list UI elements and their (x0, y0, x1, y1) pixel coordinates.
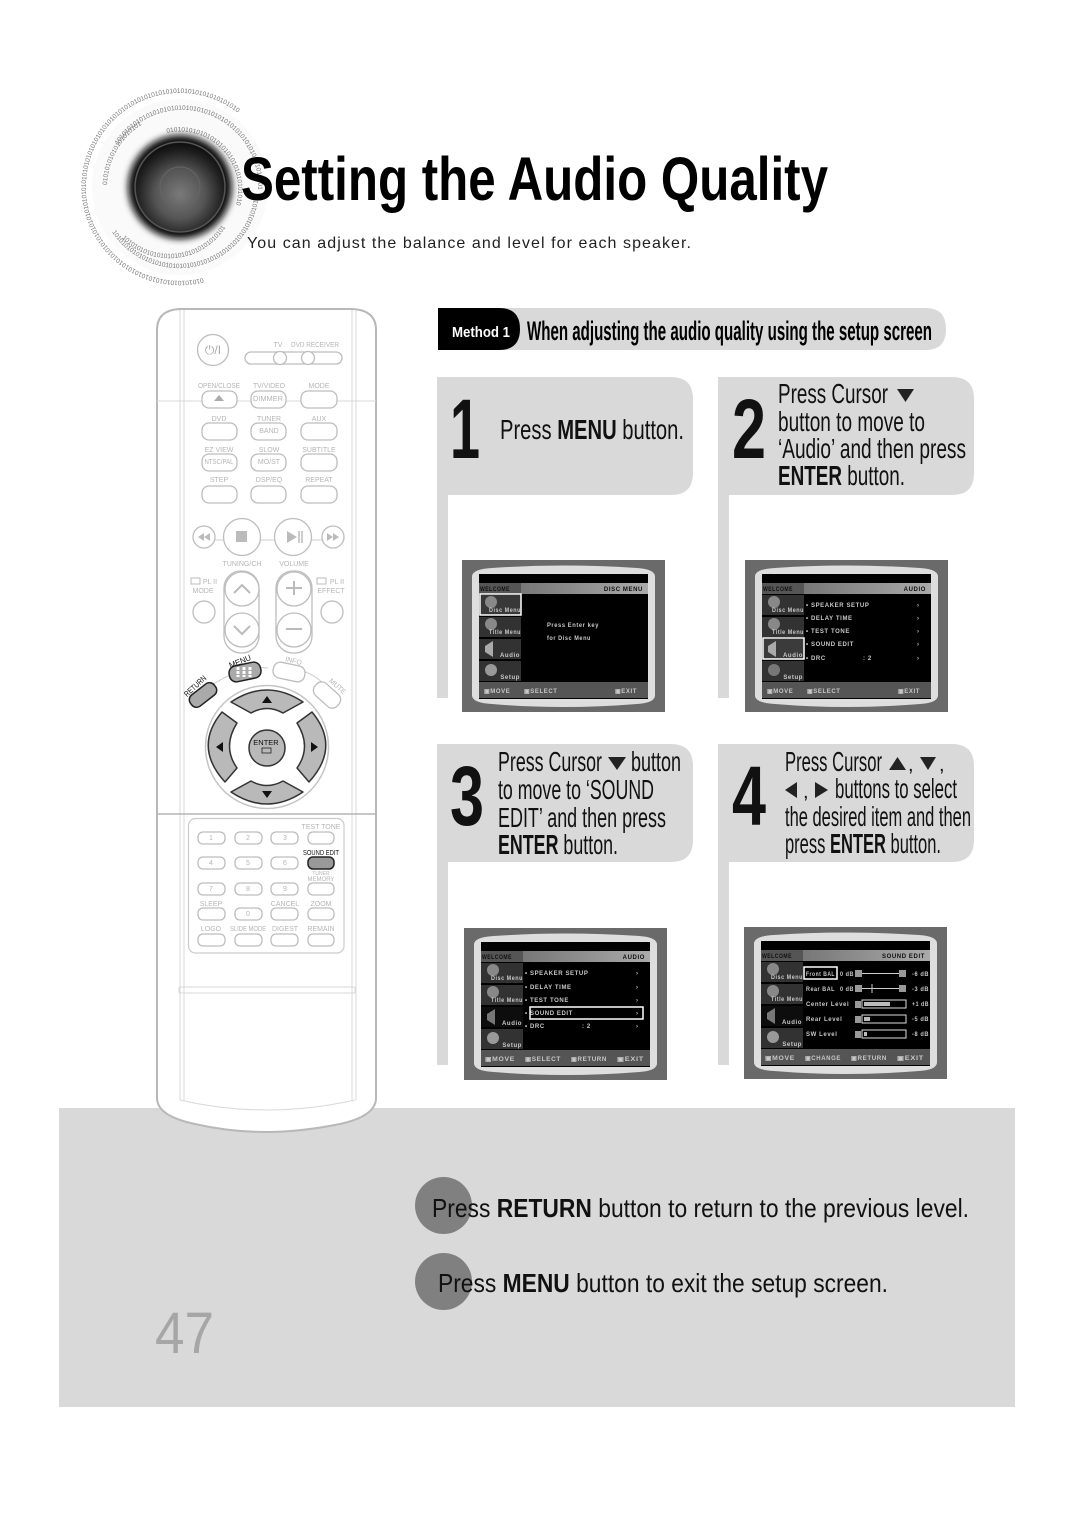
top buttons: AUX (312, 416, 327, 423)
screen 2: audio menu: ▣MOVE (767, 689, 793, 695)
screen 4: sound edit levels: Setup (782, 1042, 802, 1048)
step 2 card: button to move to (778, 406, 925, 437)
screen 3: sound edit selected: › (636, 1011, 639, 1017)
step 4 card: , (939, 754, 945, 776)
number keypad: SLEEP (200, 901, 223, 908)
number keypad: LOGO (201, 926, 222, 933)
screen 3: sound edit selected: AUDIO (623, 955, 645, 961)
transport buttons: TUNING/CH (223, 561, 261, 568)
screen 3: sound edit selected: › (636, 998, 639, 1004)
screen 1: disc menu: ▣SELECT (524, 689, 558, 695)
screen 2: audio menu: Audio (783, 653, 803, 659)
screen 1: disc menu: for Disc Menu (547, 636, 591, 642)
step 2 card: Press Cursor (778, 378, 888, 409)
number keypad: 5 (246, 860, 250, 867)
remote control (157, 309, 376, 1132)
screen 4: sound edit levels: Audio (782, 1020, 802, 1026)
number keypad: 6 (283, 860, 287, 867)
screen 2: audio menu: Disc Menu (772, 608, 804, 614)
screen 3: sound edit selected: Setup (502, 1043, 522, 1049)
step 4 card: , (908, 754, 914, 776)
step 2 card: ‘Audio’ and then press (778, 433, 966, 464)
number keypad (188, 818, 344, 953)
tuning and volume rockers: EFFECT (317, 588, 345, 595)
screen 1: disc menu: ▣EXIT (615, 689, 637, 695)
screen 3: sound edit selected: WELCOME (482, 955, 512, 961)
note 2 bullet (415, 1253, 472, 1310)
top buttons: DVD RECEIVER (291, 342, 339, 349)
step 3 card: button (631, 746, 681, 777)
binary rings: 101010101010101010101010101010101010101010101010101010101010101010101010101010101010101010101010 (112, 200, 258, 268)
number keypad: DIGEST (272, 926, 299, 933)
screen 4: sound edit levels: Rear Level (806, 1017, 842, 1023)
screen 4: sound edit levels: ▣EXIT (897, 1056, 924, 1062)
screen 4: sound edit levels: ▣CHANGE (805, 1056, 841, 1062)
subtitle: You can adjust the balance and level for each speaker. (247, 235, 691, 252)
step 4 card: 4 (732, 749, 766, 843)
screen 2: audio menu: › (917, 642, 920, 648)
top buttons: DSP/EQ (256, 477, 283, 484)
step 2 card: 2 (732, 382, 766, 476)
screen 4: sound edit levels: Disc Menu (771, 975, 803, 981)
number keypad: 0 (246, 911, 250, 918)
screen 4: sound edit levels: -5 dB (912, 1017, 929, 1023)
screen 1: disc menu: Disc Menu (489, 608, 521, 614)
screen 2: audio menu: Setup (783, 675, 803, 681)
screen 2: audio menu: › (917, 603, 920, 609)
screen 3: sound edit selected: • DELAY TIME (525, 985, 572, 991)
background band (59, 1108, 1015, 1407)
screen 2: audio menu: › (917, 629, 920, 635)
binary rings: 0101010101010101010101010101010101010101010101010101010101010101010101010101010101010101010101010101010101010101010101010101010101010101010101010101010 (81, 88, 240, 286)
note 1 bullet (415, 1177, 472, 1234)
step 4 card: buttons to select (835, 773, 957, 804)
page number: 47 (155, 1301, 214, 1366)
screen 3: sound edit selected (464, 928, 667, 1080)
step 2 card: ENTER button. (778, 460, 905, 491)
speaker emblem (81, 88, 263, 286)
screen 3: sound edit selected: : 2 (582, 1024, 591, 1030)
screen 3: sound edit selected: Title Menu (491, 998, 523, 1004)
number keypad: 1 (209, 835, 213, 842)
step 1 card (437, 377, 693, 698)
step 3 card: EDIT’ and then press (498, 802, 666, 833)
number keypad: TUNER (312, 871, 330, 877)
step 4 card (718, 744, 974, 1065)
top buttons: MO/ST (258, 459, 281, 466)
top buttons: TUNER (257, 416, 281, 423)
icon: down triangle (897, 389, 914, 402)
highlighted return and menu buttons: MENU (228, 653, 253, 670)
screen 4: sound edit levels: -3 dB (912, 987, 929, 993)
tuning and volume rockers: MODE (192, 588, 214, 595)
screen 2: audio menu: • DRC (806, 656, 826, 662)
screen 3: sound edit selected: • SPEAKER SETUP (525, 971, 588, 977)
method banner (438, 308, 946, 350)
method banner: Method 1 (452, 324, 510, 341)
tuning and volume rockers (191, 571, 345, 653)
step 3 card: Press Cursor (498, 746, 602, 777)
screen 1: disc menu (462, 560, 665, 712)
step 3 card: to move to ‘SOUND (498, 774, 654, 805)
top buttons: DIMMER (253, 396, 283, 403)
screen 2: audio menu: ▣SELECT (807, 689, 841, 695)
step 3 card: 3 (450, 749, 484, 843)
selection box (530, 1007, 643, 1019)
highlighted return and menu buttons: RETURN (182, 674, 208, 699)
transport buttons: VOLUME (279, 561, 309, 568)
transport buttons (193, 518, 344, 568)
screen 3: sound edit selected: • TEST TONE (525, 998, 569, 1004)
step 4 card: Press Cursor (785, 746, 882, 777)
screen 3: sound edit selected: ▣EXIT (617, 1057, 644, 1063)
screen 4: sound edit levels: Front BAL (806, 972, 835, 978)
number keypad: REMAIN (307, 926, 335, 933)
top buttons: MODE (308, 383, 330, 390)
top buttons: ⏻/I (205, 343, 221, 357)
screen 2: audio menu: › (917, 656, 920, 662)
tuning and volume rockers: PL II (330, 579, 344, 586)
screen 4: sound edit levels: 0 dB (840, 972, 854, 978)
screen 2: audio menu: Title Menu (772, 630, 804, 636)
screen 4: sound edit levels: SOUND EDIT (882, 954, 925, 960)
screen 1: disc menu: Setup (500, 675, 520, 681)
navigation pad (206, 686, 328, 808)
top buttons: REPEAT (305, 477, 333, 484)
screen 4: sound edit levels: 0 dB (840, 987, 854, 993)
screen 2: audio menu: WELCOME (763, 587, 793, 593)
step 2 card (718, 377, 974, 698)
screen 2: audio menu: : 2 (863, 656, 872, 662)
screen 1: disc menu: ▣MOVE (484, 689, 510, 695)
screen 2: audio menu: • SOUND EDIT (806, 642, 854, 648)
icon: cursor triangles (785, 757, 936, 798)
top buttons: TV (274, 342, 283, 349)
screen 4: sound edit levels: SW Level (806, 1032, 837, 1038)
screen 3: sound edit selected: ▣MOVE (485, 1057, 515, 1063)
step 1 card: Press MENU button. (500, 414, 684, 445)
screen 4: sound edit levels: -6 dB (912, 972, 929, 978)
navigation pad: ENTER (253, 738, 279, 747)
screen 2: audio menu: AUDIO (904, 587, 926, 593)
screen 4: sound edit levels: Rear BAL (806, 987, 835, 993)
step 1 card: 1 (450, 382, 480, 476)
screen 1: disc menu: Title Menu (489, 630, 521, 636)
step 4 card: press ENTER button. (785, 828, 941, 859)
screen 3: sound edit selected: • DRC (525, 1024, 545, 1030)
number keypad: 3 (283, 835, 287, 842)
binary rings: 10101010101010101010101010101010101010101010101010101010101 (122, 226, 226, 258)
screen 2: audio menu: › (917, 616, 920, 622)
screen 4: sound edit levels: WELCOME (762, 954, 792, 960)
screen 2: audio menu (745, 560, 948, 712)
remote body (157, 309, 376, 1132)
highlighted return and menu buttons (182, 653, 347, 711)
number keypad: 4 (209, 860, 213, 867)
screen 4: sound edit levels: -8 dB (912, 1032, 929, 1038)
top buttons: EZ VIEW (205, 447, 234, 454)
top buttons: TV/VIDEO (253, 383, 286, 390)
top buttons: SLOW (259, 447, 280, 454)
selection box (804, 967, 837, 979)
screen 4: sound edit levels: ▣MOVE (765, 1056, 795, 1062)
number keypad: SOUND EDIT (303, 848, 339, 857)
number keypad: 2 (246, 835, 250, 842)
screen 2: audio menu: • DELAY TIME (806, 616, 853, 622)
screen 4: sound edit levels (744, 927, 947, 1079)
screen 4: sound edit levels: +1 dB (912, 1002, 929, 1008)
step 3 card: ENTER button. (498, 829, 618, 860)
tuning and volume rockers: PL II (203, 579, 217, 586)
top buttons: DVD (212, 416, 226, 423)
highlighted sound edit button (308, 857, 334, 869)
binary rings (81, 88, 263, 286)
screen 1: disc menu: DISC MENU (604, 587, 643, 593)
screen 4: sound edit levels: Center Level (806, 1002, 849, 1008)
top buttons (198, 334, 342, 503)
number keypad: SLIDE MODE (230, 926, 266, 933)
number keypad: 8 (246, 886, 250, 893)
highlighted return and menu buttons: INFO (284, 656, 303, 667)
screen 3: sound edit selected: • SOUND EDIT (525, 1011, 573, 1017)
screen 3: sound edit selected: › (636, 1024, 639, 1030)
number keypad: TEST TONE (302, 824, 341, 831)
highlighted return and menu buttons: MUTE (327, 678, 347, 696)
number keypad: MEMORY (308, 877, 334, 883)
screen 3: sound edit selected: Audio (502, 1021, 522, 1027)
note 2: Press MENU button to exit the setup screen. (438, 1268, 888, 1298)
screen 1: disc menu: Press Enter key (547, 623, 599, 629)
icon: down triangle (608, 757, 626, 770)
top buttons: OPEN/CLOSE (198, 383, 240, 390)
note 1: Press RETURN button to return to the previous level. (432, 1193, 969, 1223)
screen 3: sound edit selected: › (636, 985, 639, 991)
step 4 card: , (803, 781, 809, 803)
number keypad: 7 (209, 886, 213, 893)
screen 1: disc menu: Audio (500, 653, 520, 659)
screen 1: disc menu: WELCOME (480, 587, 510, 593)
screen 3: sound edit selected: ▣RETURN (571, 1057, 607, 1063)
screen 4: sound edit levels: ▣RETURN (851, 1056, 887, 1062)
screen 2: audio menu: • TEST TONE (806, 629, 850, 635)
title: Setting the Audio Quality (241, 145, 828, 213)
screen 4: sound edit levels: Title Menu (771, 997, 803, 1003)
step 3 card (437, 744, 693, 1065)
number keypad: CANCEL (271, 901, 299, 908)
number keypad: 9 (283, 886, 287, 893)
top buttons: STEP (210, 477, 228, 484)
screen 3: sound edit selected: ▣SELECT (525, 1057, 561, 1063)
screen 3: sound edit selected: › (636, 971, 639, 977)
top buttons: NTSC/PAL (204, 459, 234, 466)
top buttons: BAND (259, 428, 279, 435)
top buttons: SUBTITLE (302, 447, 336, 454)
screen 2: audio menu: • SPEAKER SETUP (806, 603, 869, 609)
screen 3: sound edit selected: Disc Menu (491, 976, 523, 982)
number keypad: ZOOM (310, 901, 332, 908)
screen 2: audio menu: ▣EXIT (898, 689, 920, 695)
